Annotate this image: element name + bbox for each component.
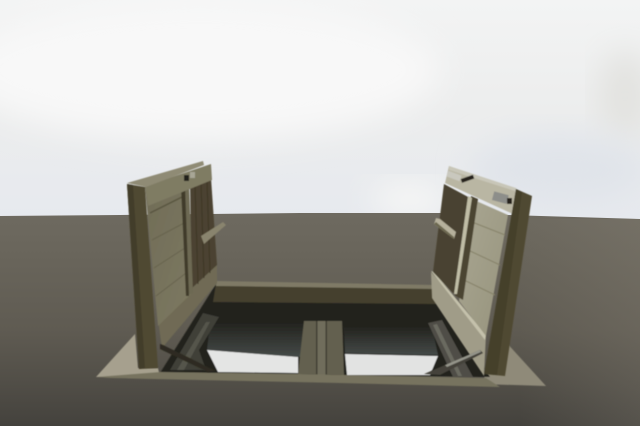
central mullion (298, 321, 344, 375)
right shutter (431, 166, 532, 376)
building wall (0, 213, 640, 426)
dark glass left (207, 323, 305, 357)
top lintel (213, 284, 436, 304)
left reveal ledge (96, 334, 160, 377)
top rail (145, 164, 212, 206)
handle (201, 222, 226, 244)
centre stile (456, 196, 478, 300)
hinge (184, 172, 195, 181)
top rail (445, 166, 518, 214)
left shutter (127, 161, 226, 369)
right reveal ledge (480, 341, 546, 386)
centre stile (182, 183, 193, 296)
sky background (0, 0, 640, 222)
left stay bar (160, 344, 216, 372)
bright reflection right (345, 354, 438, 375)
right stay bar (424, 350, 483, 375)
thick outer edge (484, 189, 532, 376)
inner louver panel (433, 184, 470, 296)
dark glass right (344, 327, 438, 355)
panel frame bottom (158, 265, 217, 348)
window opening (96, 281, 546, 387)
right inner frame (428, 320, 473, 377)
opening interior (160, 284, 490, 377)
sill (96, 372, 500, 387)
handle (434, 218, 456, 239)
main shutter face (459, 200, 508, 336)
main shutter face (145, 177, 191, 326)
inner louver panel (190, 178, 217, 288)
hinge upper (446, 171, 474, 183)
thick outer edge (127, 184, 158, 369)
bright reflection left (207, 350, 298, 373)
hinge lower (492, 191, 512, 204)
top strip (127, 161, 204, 187)
left inner frame (170, 313, 219, 370)
panel frame bottom (431, 272, 486, 376)
